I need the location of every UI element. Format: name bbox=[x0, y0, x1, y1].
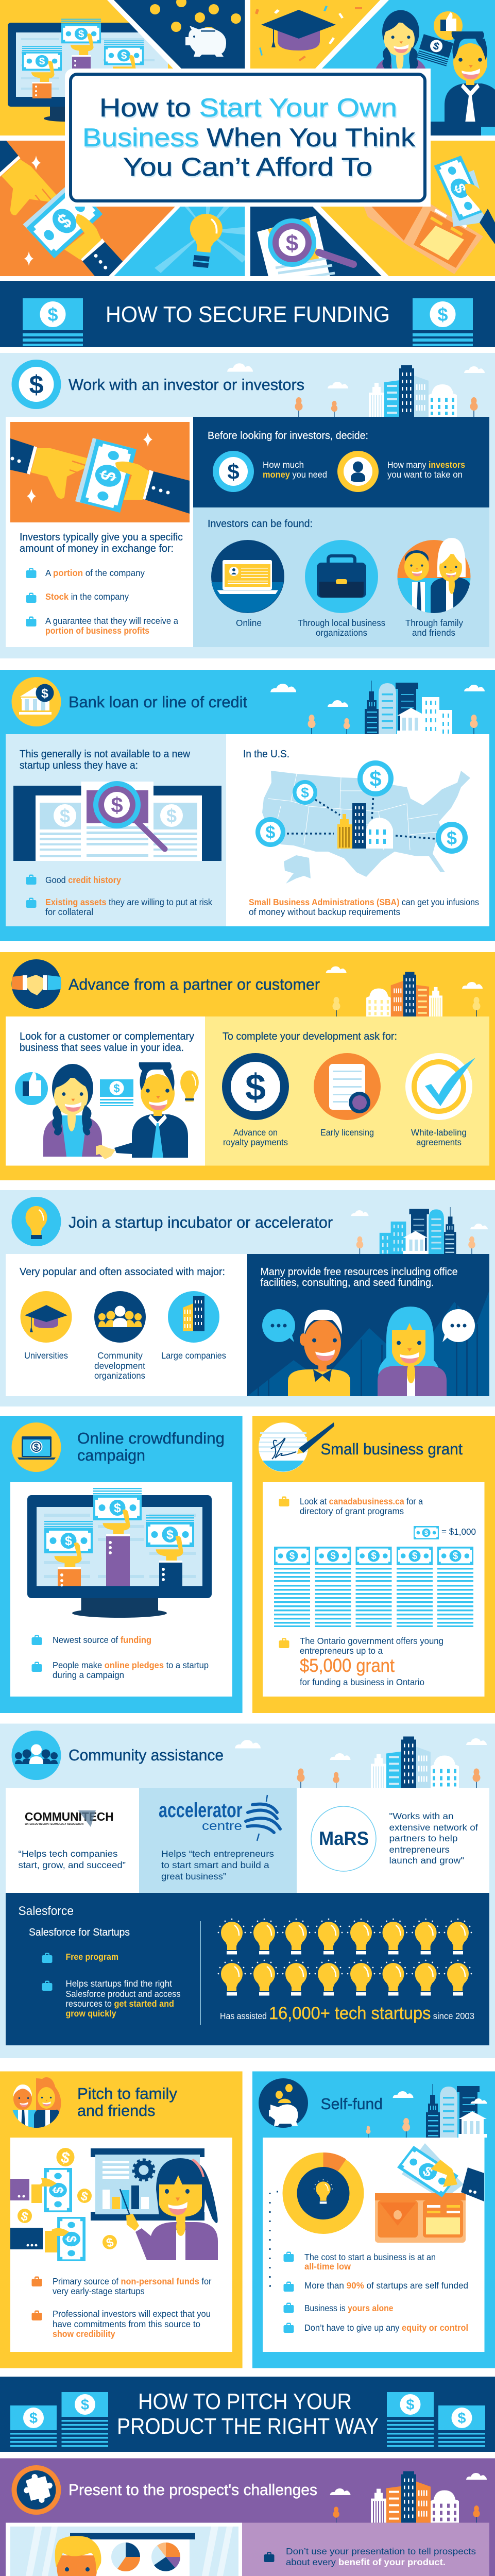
text: program: Salesforce product and access bbox=[66, 1989, 181, 1999]
icon: bills right: $ bbox=[406, 2397, 415, 2413]
panel: present to the prospect's challenges bbox=[0, 2459, 495, 2576]
panel: to complete your development bbox=[205, 1016, 489, 1165]
heading: Investors can be found: bbox=[208, 518, 313, 530]
illustration: woman presenting to investors: $ bbox=[59, 2148, 72, 2167]
labels: online, local business, family: organizations bbox=[316, 628, 367, 638]
heading: and friends bbox=[77, 2102, 156, 2120]
text: Helps “tech entrepreneurs bbox=[161, 1849, 274, 1859]
panel: magnifier on documents bbox=[250, 207, 382, 276]
heading: In the U.S. bbox=[243, 749, 289, 760]
list: what investors receive: Stock in the company bbox=[45, 591, 129, 602]
panel: popular and associated bbox=[6, 1254, 247, 1396]
logo: MaRS bbox=[311, 1806, 376, 1871]
logo: accelerator centre: accelerator bbox=[159, 1799, 243, 1822]
panel: MaRS bbox=[297, 1788, 489, 1893]
panel: in the U.S. bbox=[226, 734, 489, 926]
list: what investors receive: A portion of the company bbox=[45, 568, 145, 578]
map: United States with SBA offices: $ bbox=[447, 827, 457, 849]
text: program: grow quickly bbox=[66, 2008, 116, 2019]
text: program: resources to get started and bbox=[66, 1998, 174, 2009]
text: extensive network of bbox=[389, 1822, 478, 1833]
icon: royalty dollar: $ bbox=[245, 1067, 266, 1108]
map: United States with SBA offices: $ bbox=[266, 823, 276, 842]
labels: online, local business, family: Through local business bbox=[298, 618, 385, 628]
icon: dollar: $ bbox=[29, 370, 44, 399]
text: facilities, consulting, and seed funding. bbox=[261, 1277, 434, 1289]
legend: bill equals $1,000 bbox=[414, 1526, 476, 1539]
panel: graduation cap and happy people bbox=[250, 0, 495, 135]
text: partners to help bbox=[389, 1833, 457, 1843]
icon: bills left: $ bbox=[81, 2397, 89, 2413]
panel: generally not available bbox=[6, 734, 226, 926]
heading: Bank loan or line of credit bbox=[69, 693, 247, 711]
icon: laptop: $ bbox=[34, 1442, 39, 1452]
map: United States with SBA offices: $ bbox=[369, 767, 382, 791]
text: entrepreneurs bbox=[389, 1844, 450, 1855]
text: Look for a customer or complementary bbox=[20, 1031, 194, 1042]
labels: online, local business, family bbox=[236, 618, 463, 638]
heading: Online crowdfunding bbox=[77, 1429, 225, 1447]
labels: Large companies bbox=[161, 1350, 226, 1361]
text: This generally is not available to a new bbox=[20, 749, 191, 760]
illustration: credit documents and magnifier bbox=[13, 781, 221, 861]
text bbox=[389, 1811, 478, 1866]
icon: puzzle piece bbox=[11, 2465, 61, 2515]
icon: dollar bill right bbox=[413, 298, 473, 346]
heading bbox=[77, 1429, 225, 1464]
stat: 16,000+ tech startups: Has assisted bbox=[220, 2011, 267, 2021]
icon: university bbox=[21, 1291, 72, 1343]
icon: bills right: $ bbox=[457, 2410, 466, 2427]
text: program: Helps startups find the right bbox=[66, 1978, 172, 1989]
content card bbox=[10, 2138, 232, 2352]
text: "Works with an bbox=[389, 1811, 453, 1821]
labels bbox=[223, 1127, 467, 1147]
panel: bank loan or line of credit bbox=[0, 670, 495, 941]
city skyline bbox=[227, 363, 485, 417]
panel: small business grant bbox=[252, 1416, 495, 1713]
panel: handing over money bbox=[0, 141, 175, 276]
list: very early-stage startups bbox=[53, 2286, 145, 2296]
list: Business is yours alone bbox=[304, 2303, 394, 2313]
city skyline bbox=[270, 681, 485, 734]
list: More than 90% of startups are self funded bbox=[304, 2280, 468, 2291]
labels bbox=[24, 1350, 226, 1381]
icon: bank: $ bbox=[41, 686, 48, 701]
title card bbox=[65, 69, 431, 207]
panel: before looking for investors bbox=[193, 417, 489, 507]
map: United States with SBA offices bbox=[255, 760, 470, 884]
heading: title: You Can’t Afford To bbox=[123, 152, 372, 181]
labels: organizations bbox=[94, 1370, 145, 1381]
heading: Small business grant bbox=[320, 1440, 463, 1458]
text: how many investors: How many investors bbox=[387, 460, 465, 470]
text bbox=[20, 749, 191, 771]
heading: Community assistance bbox=[69, 1746, 224, 1764]
panel: community assistance bbox=[0, 1724, 495, 2058]
icon: local business briefcase bbox=[305, 540, 378, 613]
heading: Very popular and often associated with major: bbox=[20, 1266, 225, 1278]
icon: signature and pen bbox=[259, 1422, 334, 1472]
icon: dollar: $ bbox=[227, 460, 240, 484]
heading: how to secure funding: HOW TO SECURE FUNDING bbox=[106, 302, 390, 327]
text: to start smart and build a bbox=[161, 1860, 269, 1870]
panel: don't tell every benefit: Don’t use your presentation to tell prospects bbox=[286, 2546, 476, 2556]
text: Ontario grant bbox=[279, 1636, 443, 1687]
heading: Work with an investor or investors bbox=[69, 376, 304, 394]
panel: don't tell every benefit bbox=[242, 2523, 489, 2576]
logo: Communitech: WATERLOO REGION TECHNOLOGY ASSOCIATION bbox=[25, 1823, 83, 1826]
icon: person bbox=[337, 451, 379, 492]
heading: Join a startup incubator or accelerator bbox=[69, 1213, 333, 1231]
panel: online crowdfunding campaign bbox=[0, 1416, 243, 1713]
illustration: credit documents and magnifier: $ bbox=[60, 805, 70, 826]
list: all-time low bbox=[304, 2261, 351, 2272]
icon: laptop bbox=[11, 1422, 61, 1472]
heading: Advance from a partner or customer bbox=[69, 975, 320, 993]
panel: free resources bbox=[247, 1254, 489, 1396]
panel: startup incubator or accelerator bbox=[0, 1190, 495, 1406]
illustration: woman presenting to investors: $ bbox=[105, 2235, 115, 2250]
text bbox=[261, 1266, 457, 1289]
icon: royalty dollar bbox=[222, 1053, 289, 1120]
heading: Before looking for investors, decide: bbox=[208, 430, 368, 442]
text: exchange: amount of money in exchange for: bbox=[20, 543, 174, 554]
text: how many investors: you want to take on bbox=[387, 469, 463, 480]
list: show credibility bbox=[53, 2329, 115, 2339]
icon: white-label check bbox=[405, 1053, 475, 1120]
list: Don’t have to give up any equity or control bbox=[304, 2323, 468, 2333]
logo: accelerator centre: centre bbox=[202, 1819, 242, 1833]
panel: self-fund bbox=[252, 2071, 495, 2368]
illustration: handshake of woman and man bbox=[15, 1062, 199, 1159]
text: launch and grow" bbox=[389, 1855, 464, 1866]
list: Newest source of funding bbox=[53, 1635, 151, 1645]
text: exchange: Investors typically give you a specific bbox=[20, 532, 183, 543]
list: have commitments from this source to bbox=[53, 2319, 200, 2329]
icon: licensing document bbox=[314, 1053, 381, 1120]
text: start, grow, and succeed” bbox=[19, 1860, 126, 1870]
logo: Communitech: COMMUNITECH bbox=[25, 1810, 114, 1823]
icon: community bbox=[11, 1731, 61, 1780]
illustration: handshake of woman and man: $ bbox=[113, 1082, 120, 1095]
text: SBA bbox=[249, 897, 479, 917]
illustration: credit documents and magnifier: $ bbox=[111, 793, 123, 817]
illustration: monitor with bills bbox=[27, 1488, 212, 1618]
icon: dollar bill left: $ bbox=[47, 304, 58, 325]
pictogram: 5 stacks of bills bbox=[274, 1547, 473, 1627]
panel: don't tell every benefit: about every benefit of your product. bbox=[286, 2557, 446, 2567]
text: “Helps tech companies bbox=[19, 1849, 118, 1859]
text: SBA: of money without backup requirements bbox=[249, 907, 400, 917]
labels: online, local business, family: Online bbox=[236, 618, 262, 628]
icon: online laptop bbox=[211, 540, 284, 613]
text: Ontario grant: entrepreneurs up to a bbox=[300, 1646, 383, 1656]
icon: bills left bbox=[10, 2392, 108, 2447]
panel: Salesforce for Startups bbox=[6, 1893, 489, 2045]
logo: accelerator centre bbox=[159, 1795, 280, 1841]
heading bbox=[117, 2389, 379, 2439]
list: People make online pledges to a startup bbox=[53, 1660, 209, 1670]
illustration: mentors talking bbox=[247, 1291, 489, 1396]
labels: development bbox=[94, 1361, 145, 1371]
heading: title bbox=[82, 93, 416, 181]
text: how much money: How much bbox=[263, 460, 304, 470]
list: what investors receive bbox=[26, 568, 178, 636]
list: what investors receive: portion of business profits bbox=[45, 625, 149, 636]
labels: online, local business, family: and friends bbox=[412, 628, 455, 638]
text: great business” bbox=[161, 1871, 226, 1882]
text: program bbox=[29, 1927, 181, 2019]
panel: piggy bank and coins bbox=[150, 0, 241, 57]
list: Existing assets they are willing to put at risk bbox=[45, 897, 212, 907]
illustration: woman presenting to investors: $ bbox=[79, 2189, 90, 2204]
labels: online, local business, family: Through family bbox=[405, 618, 463, 628]
text: Ontario grant: $5,000 grant bbox=[300, 1655, 395, 1676]
text: canadabusiness bbox=[279, 1496, 423, 1516]
city skyline bbox=[235, 1736, 487, 1788]
content card bbox=[263, 2138, 484, 2352]
city skyline bbox=[326, 967, 483, 1016]
stat: 16,000+ tech startups bbox=[220, 2004, 474, 2023]
illustration: woman presenting to investors bbox=[10, 2148, 218, 2261]
panel: crowdfunding monitor bbox=[0, 0, 245, 135]
chart: 90 percent donut bbox=[282, 2153, 364, 2234]
text: SBA: Small Business Administrations (SBA) can get you infusions bbox=[249, 897, 479, 907]
icon: family and friends bbox=[397, 538, 471, 615]
panel: Communitech bbox=[6, 1788, 139, 1893]
icon: handshake bbox=[11, 959, 61, 1009]
banner: how to pitch your product bbox=[0, 2377, 495, 2452]
labels: Community bbox=[97, 1350, 143, 1361]
illustration: man presenting charts bbox=[6, 2523, 242, 2576]
illustration: handing over money bbox=[10, 422, 190, 522]
icon: bills left: $ bbox=[29, 2410, 38, 2427]
stat: 16,000+ tech startups: 16,000+ tech startups bbox=[269, 2004, 431, 2023]
panel: wallet and bills bbox=[320, 141, 495, 276]
text bbox=[20, 1031, 194, 1054]
heading: Present to the prospect's challenges bbox=[69, 2481, 317, 2499]
content card bbox=[263, 1482, 484, 1697]
logo: MaRS: MaRS bbox=[319, 1828, 369, 1849]
list: during a campaign bbox=[53, 1670, 124, 1680]
text bbox=[161, 1849, 274, 1882]
text: business that sees value in your idea. bbox=[20, 1042, 184, 1054]
list bbox=[26, 875, 212, 917]
icon: bills right bbox=[387, 2392, 485, 2447]
panel: light bulb with rays bbox=[109, 207, 245, 276]
text: canadabusiness: Look at canadabusiness.ca for a bbox=[300, 1496, 423, 1506]
list: for collateral bbox=[45, 907, 93, 917]
labels: Early licensing bbox=[320, 1127, 374, 1138]
text: program: Salesforce for Startups bbox=[29, 1927, 130, 1938]
text: exchange bbox=[20, 532, 183, 554]
panel: work with an investor bbox=[0, 353, 495, 658]
text: how much money: money you need bbox=[263, 469, 327, 480]
list: The cost to start a business is at an bbox=[304, 2252, 436, 2262]
labels: White-labeling bbox=[411, 1127, 467, 1138]
panel: look for a customer bbox=[6, 1016, 205, 1165]
text: how much money bbox=[263, 460, 327, 480]
list bbox=[32, 1635, 209, 1680]
icon: dollar bill left bbox=[23, 298, 83, 346]
text: startup unless they have a: bbox=[20, 760, 138, 771]
text: Ontario grant: The Ontario government offers young bbox=[300, 1636, 443, 1646]
text: program: Free program bbox=[66, 1952, 118, 1962]
heading: Self-fund bbox=[320, 2095, 383, 2113]
arrow: dotted connector bbox=[270, 2192, 278, 2286]
icon: large companies bbox=[168, 1291, 219, 1343]
city skyline bbox=[351, 1207, 488, 1254]
labels: Advance on bbox=[233, 1127, 278, 1138]
icon: dollar bbox=[213, 451, 254, 492]
heading: campaign bbox=[77, 1446, 145, 1464]
panel: investors give money bbox=[6, 417, 193, 647]
labels: Universities bbox=[24, 1350, 68, 1361]
illustration: woman presenting to investors: $ bbox=[20, 2209, 30, 2224]
panel: advance from a partner or customer bbox=[0, 952, 495, 1180]
legend: bill equals $1,000: = $1,000 bbox=[441, 1527, 476, 1537]
heading: HOW TO PITCH YOUR bbox=[138, 2389, 352, 2414]
icon: family bbox=[11, 2077, 61, 2128]
list: Professional investors will expect that you bbox=[53, 2309, 211, 2319]
icon: dollar bbox=[11, 360, 61, 409]
heading: Salesforce bbox=[19, 1904, 74, 1918]
heading: Pitch to family bbox=[77, 2084, 177, 2103]
list: what investors receive: A guarantee that they will receive a bbox=[45, 616, 178, 626]
text: Ontario grant: for funding a business in Ontario bbox=[300, 1677, 424, 1687]
labels: royalty payments bbox=[223, 1137, 288, 1147]
map: United States with SBA offices: $ bbox=[301, 785, 309, 801]
list bbox=[283, 2251, 468, 2333]
icon: bank bbox=[11, 677, 61, 726]
pictogram: 16 light bulbs bbox=[218, 1919, 472, 1996]
heading: PRODUCT THE RIGHT WAY bbox=[117, 2414, 379, 2439]
heading bbox=[77, 2084, 177, 2120]
city skyline bbox=[330, 2471, 487, 2523]
text: Many provide free resources including office bbox=[261, 1266, 457, 1278]
icon: piggy bank bbox=[259, 2078, 308, 2128]
header illustration panels bbox=[0, 0, 495, 297]
icon: light bulb bbox=[11, 1197, 61, 1246]
icon: community bbox=[94, 1291, 146, 1343]
panel: accelerator centre bbox=[139, 1788, 297, 1893]
panel: investors can be found bbox=[193, 507, 489, 647]
content card bbox=[10, 1482, 232, 1697]
heading: To complete your development ask for: bbox=[223, 1031, 397, 1042]
illustration: wallet with bills bbox=[375, 2143, 484, 2243]
text: canadabusiness: directory of grant programs bbox=[300, 1506, 404, 1516]
panel: pitch to family and friends bbox=[0, 2071, 243, 2368]
list: Good credit history bbox=[45, 875, 121, 885]
list: Primary source of non-personal funds for bbox=[53, 2276, 212, 2286]
illustration: credit documents and magnifier: $ bbox=[166, 805, 177, 826]
heading: title: Business When You Think bbox=[82, 123, 416, 152]
text: how many investors bbox=[387, 460, 465, 480]
text bbox=[19, 1849, 126, 1870]
list bbox=[32, 2276, 212, 2339]
heading: title: How to Start Your Own bbox=[99, 93, 397, 122]
stat: 16,000+ tech startups: since 2003 bbox=[433, 2011, 474, 2021]
banner: how to secure funding bbox=[0, 281, 495, 347]
labels: agreements bbox=[416, 1137, 462, 1147]
icon: dollar bill right: $ bbox=[437, 304, 448, 325]
city skyline bbox=[366, 2084, 495, 2138]
